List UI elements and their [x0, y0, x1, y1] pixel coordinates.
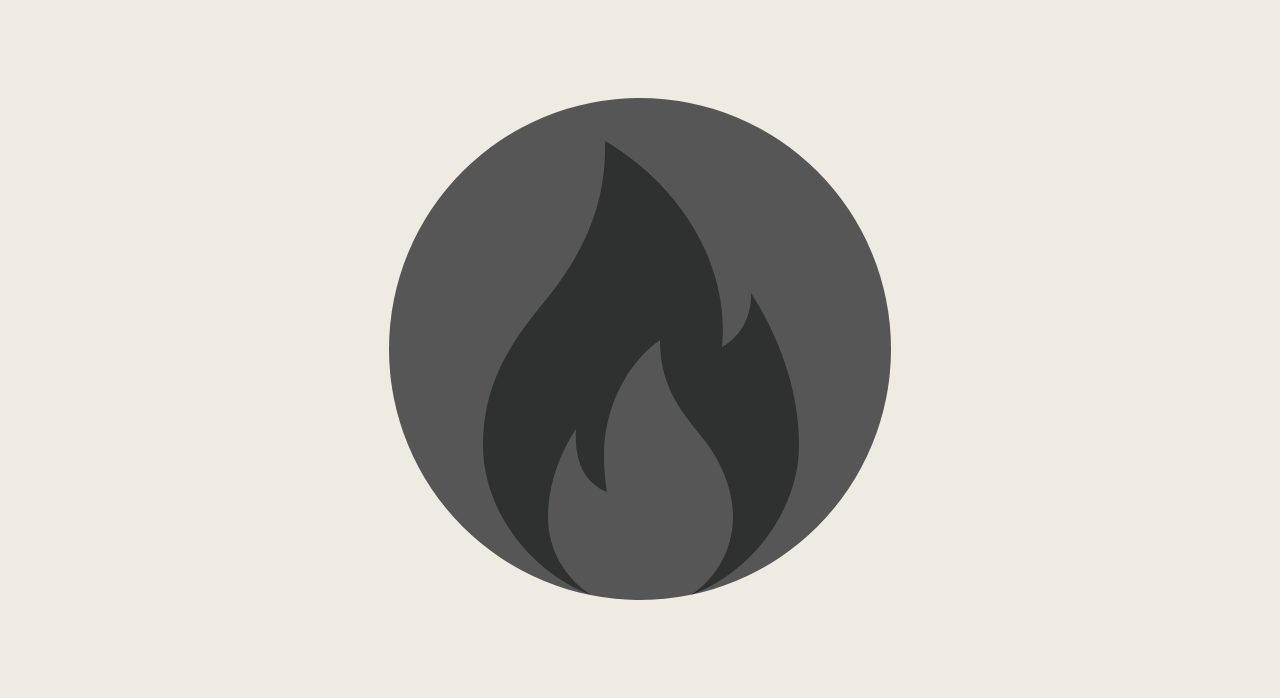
icon: grey circle badge [389, 98, 891, 600]
icon: dark flame [483, 141, 799, 595]
